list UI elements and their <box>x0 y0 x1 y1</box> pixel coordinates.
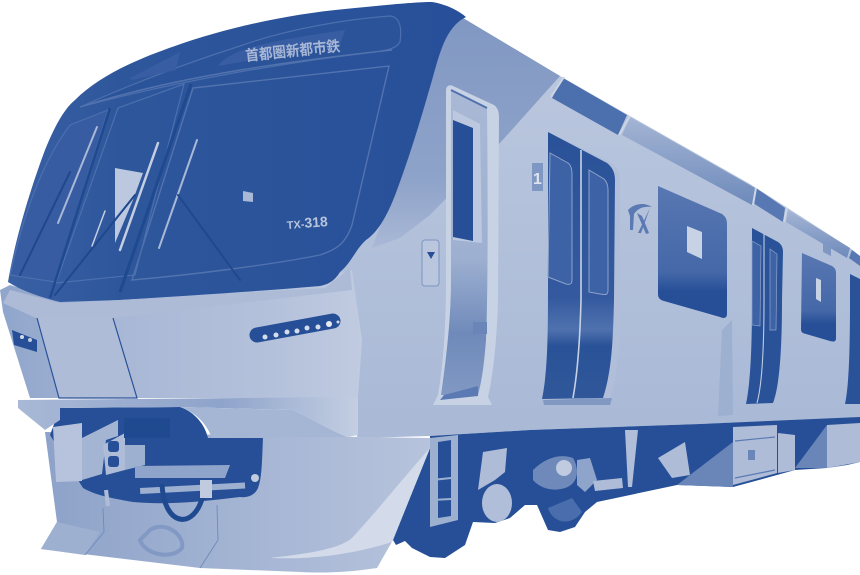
cab door <box>433 85 499 405</box>
coupler <box>53 418 259 519</box>
destination display frame <box>80 16 401 107</box>
passenger door 3 <box>845 274 860 404</box>
car number text: TX-318 <box>286 213 328 232</box>
light band below windscreen <box>3 268 352 318</box>
faint skirt seams <box>85 505 218 568</box>
passenger door 2 <box>746 228 783 404</box>
side window 2 <box>801 253 836 342</box>
wipers <box>20 127 240 295</box>
front lower body <box>0 270 362 398</box>
skirt bright edge <box>270 448 430 558</box>
ledge lower section <box>180 407 347 438</box>
lower skirt <box>41 432 430 573</box>
door 1 right window <box>589 170 608 295</box>
cab windscreen mass <box>8 2 466 302</box>
skirt lower lip <box>41 522 100 555</box>
small interior reflection <box>243 191 253 202</box>
underframe <box>393 417 860 558</box>
body weld stain <box>718 320 733 416</box>
TX logo <box>628 204 652 234</box>
upper ledge <box>18 397 358 437</box>
interior notice in window <box>115 168 143 243</box>
car number plate <box>532 163 543 191</box>
roof panels <box>551 77 860 266</box>
main window frame <box>132 66 389 280</box>
passenger door 1 <box>542 132 620 405</box>
headlight left <box>12 330 37 352</box>
upper shoulder panel <box>372 18 560 248</box>
operator name text: 首都圏新都市鉄 <box>245 37 341 65</box>
bogie equipment <box>430 430 690 527</box>
vent plate <box>823 242 831 256</box>
side window 1 <box>658 186 727 318</box>
dark coupler recess <box>50 407 263 503</box>
car number plate: 1 <box>533 171 542 188</box>
windscreen detail <box>10 16 401 298</box>
train body side <box>300 18 860 438</box>
LED light strip <box>257 320 340 340</box>
underbody boxes <box>677 423 860 487</box>
door 1 left window <box>548 153 572 284</box>
cab door window <box>453 110 482 243</box>
nose panel <box>37 318 137 398</box>
skirt reflection <box>140 527 182 555</box>
door call panel <box>422 240 439 286</box>
